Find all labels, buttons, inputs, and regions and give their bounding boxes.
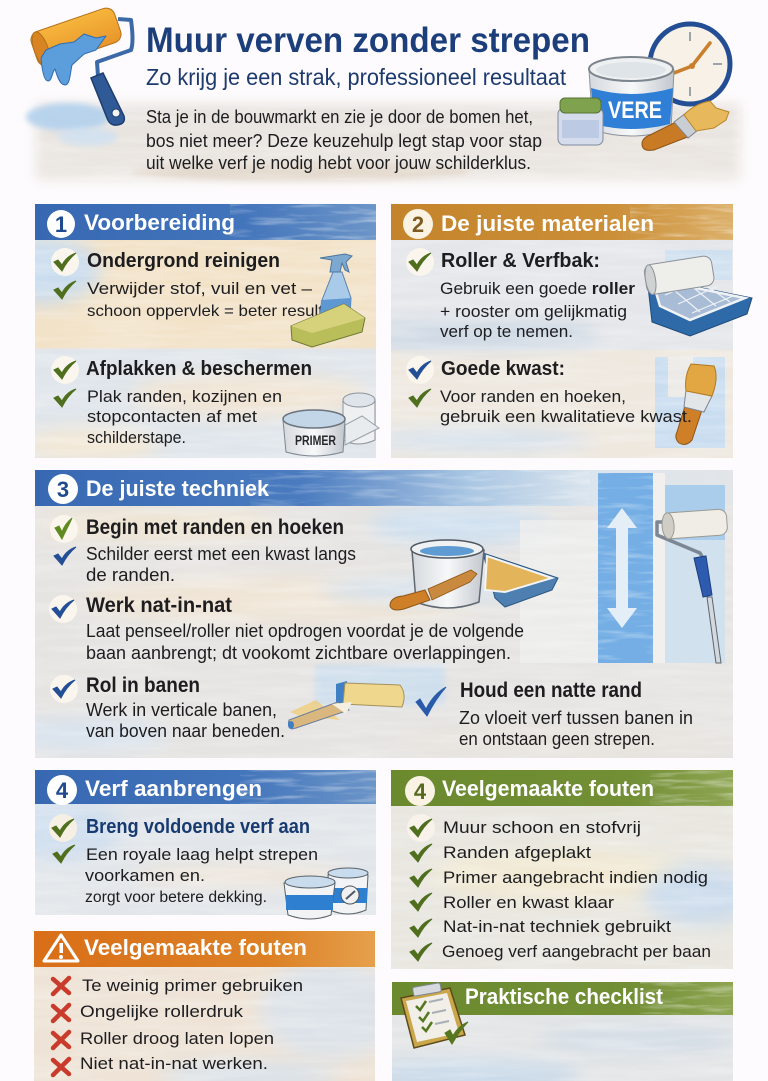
check xyxy=(410,919,432,937)
number badge: 2 xyxy=(412,212,424,237)
check xyxy=(54,281,76,299)
arrow: up and down xyxy=(607,508,637,628)
icon: paint can VERE: VERE xyxy=(608,97,662,124)
body text xyxy=(440,387,692,426)
section header bar xyxy=(391,770,733,806)
check xyxy=(416,687,446,716)
subheading: Roller & Verfbak: xyxy=(441,250,600,272)
body text: + rooster om gelijkmatig xyxy=(440,302,627,321)
body text: schilderstape. xyxy=(87,428,186,447)
header xyxy=(26,6,740,181)
body text: en ontstaan geen strepen. xyxy=(459,729,655,749)
body text: stopcontacten af met xyxy=(87,407,257,426)
body text: verf op te nemen. xyxy=(440,322,573,341)
list item: Roller en kwast klaar xyxy=(443,893,614,912)
body text xyxy=(86,544,356,585)
icon: cross xyxy=(53,1005,69,1021)
body text xyxy=(459,708,693,749)
subheading: Afplakken & beschermen xyxy=(86,358,312,380)
subheading: Werk nat-in-nat xyxy=(86,594,232,617)
check xyxy=(54,547,76,565)
intro text: uit welke verf je nodig hebt voor jouw schilderklus. xyxy=(146,153,531,173)
check xyxy=(50,675,78,703)
check xyxy=(406,356,434,384)
body text xyxy=(440,279,635,341)
check xyxy=(49,814,77,842)
body text: voorkamen en. xyxy=(85,866,205,885)
checklist xyxy=(407,814,711,961)
check xyxy=(51,356,79,384)
body text xyxy=(86,621,524,663)
check xyxy=(406,248,434,276)
icon: jar xyxy=(558,98,603,145)
icon: brush xyxy=(676,364,716,444)
error list xyxy=(53,976,303,1075)
section title: Praktische checklist xyxy=(465,984,664,1009)
panel: 4 Veelgemaakte fouten (groen) xyxy=(391,770,755,969)
number badge xyxy=(47,210,75,238)
check xyxy=(53,845,75,863)
icon: paint roller xyxy=(29,6,132,125)
number badge: 4 xyxy=(414,779,427,804)
body text: Verwijder stof, vuil en vet – xyxy=(87,279,313,298)
section title: Veelgemaakte fouten xyxy=(442,776,654,801)
number badge xyxy=(47,775,77,805)
intro text xyxy=(146,107,542,173)
intro text: Sta je in de bouwmarkt en zie je door de bomen het, xyxy=(146,107,533,127)
list item: Roller droog laten lopen xyxy=(80,1029,274,1048)
section header bar xyxy=(392,982,733,1015)
roller stripes and arrow xyxy=(598,473,725,663)
icon: sponge xyxy=(291,304,365,347)
subheading: Houd een natte rand xyxy=(460,679,642,702)
header wash band xyxy=(26,103,740,181)
number badge: 3 xyxy=(57,477,69,502)
icon: primer can: PRIMER xyxy=(295,433,336,448)
body text: Voor randen en hoeken, xyxy=(440,387,626,406)
check xyxy=(410,869,432,887)
panel: Veelgemaakte fouten (oranje) xyxy=(34,931,400,1081)
icon: spray bottle xyxy=(320,254,352,316)
title: Muur verven zonder strepen xyxy=(146,21,590,60)
section title: Voorbereiding xyxy=(84,210,235,235)
section title: Verf aanbrengen xyxy=(85,776,262,801)
section title: De juiste techniek xyxy=(86,476,270,501)
subtitle: Zo krijg je een strak, professioneel resultaat xyxy=(146,64,567,90)
section header bar xyxy=(34,931,375,967)
list item: Niet nat-in-nat werken. xyxy=(80,1054,268,1073)
body text: Een royale laag helpt strepen xyxy=(86,845,318,864)
check xyxy=(410,943,432,961)
check xyxy=(410,844,432,862)
section header bar xyxy=(391,204,733,240)
list item: Te weinig primer gebruiken xyxy=(82,976,303,995)
panel: 3 De juiste techniek xyxy=(0,470,733,758)
check xyxy=(409,389,431,407)
body text xyxy=(85,845,318,906)
section title: De juiste materialen xyxy=(441,211,654,236)
icon: cross xyxy=(53,1059,69,1075)
icon: primer can xyxy=(283,410,345,456)
body text xyxy=(87,387,282,447)
check xyxy=(51,248,79,276)
icon: clock xyxy=(650,24,730,104)
panel: 4 Verf aanbrengen xyxy=(0,770,376,919)
body text: Zo vloeit verf tussen banen in xyxy=(459,708,693,728)
icon: paint brush xyxy=(642,101,729,150)
body text: de randen. xyxy=(86,565,175,585)
list item: Genoeg verf aangebracht per baan xyxy=(442,942,711,961)
body text xyxy=(87,279,324,320)
check xyxy=(50,515,78,543)
body text: Gebruik een goede roller xyxy=(440,279,635,298)
subheading: Begin met randen en hoeken xyxy=(86,516,344,539)
number badge xyxy=(403,209,433,239)
body text: Laat penseel/roller niet opdrogen voordat je de volgende xyxy=(86,621,524,641)
body text xyxy=(86,700,285,741)
icon: cross xyxy=(53,978,69,994)
number badge: 1 xyxy=(55,212,67,237)
panel: 2 De juiste materialen xyxy=(360,204,752,458)
icon: roller and tray xyxy=(643,255,752,336)
body text: Plak randen, kozijnen en xyxy=(87,387,282,406)
body text: Werk in verticale banen, xyxy=(86,700,277,720)
section title: Veelgemaakte fouten xyxy=(84,935,307,960)
list item: Nat-in-nat techniek gebruikt xyxy=(443,917,671,936)
subheading: Breng voldoende verf aan xyxy=(86,816,310,838)
check xyxy=(407,814,435,842)
check xyxy=(49,595,77,623)
icon: cross xyxy=(53,1032,69,1048)
icon: clipboard xyxy=(401,983,468,1048)
body text: Schilder eerst met een kwast langs xyxy=(86,544,356,564)
icon: wall roller xyxy=(657,509,728,663)
icon: warning triangle xyxy=(44,935,78,961)
section header bar xyxy=(35,770,376,804)
icon: paint can VERE xyxy=(589,57,674,136)
check xyxy=(410,893,432,911)
body text: zorgt voor betere dekking. xyxy=(85,889,267,906)
subheading: Goede kwast: xyxy=(441,358,565,380)
panel: 1 Voorbereiding xyxy=(35,204,380,458)
list item: Randen afgeplakt xyxy=(443,843,591,862)
icon: bucket, tray and brush xyxy=(390,540,558,610)
body text: schoon oppervlek = beter result xyxy=(87,303,324,320)
icon: small roller xyxy=(288,681,404,729)
panel: Praktische checklist xyxy=(392,982,733,1081)
body text: van boven naar beneden. xyxy=(86,721,285,741)
check xyxy=(54,389,76,407)
intro text: bos niet meer? Deze keuzehulp legt stap voor stap xyxy=(146,131,542,151)
section header bar xyxy=(35,204,376,240)
subheading: Ondergrond reinigen xyxy=(87,250,280,272)
body text: baan aanbrengt; dt vookomt zichtbare overlappingen. xyxy=(86,643,511,663)
list item: Muur schoon en stofvrij xyxy=(443,818,641,837)
list item: Ongelijke rollerdruk xyxy=(80,1002,244,1021)
icon: two paint cans xyxy=(284,868,368,919)
number badge xyxy=(405,776,435,806)
subheading: Rol in banen xyxy=(86,674,200,697)
section header bar xyxy=(35,470,733,506)
icon: tape roll xyxy=(343,393,379,445)
number badge: 4 xyxy=(56,778,69,803)
number badge xyxy=(48,474,78,504)
list item: Primer aangebracht indien nodig xyxy=(443,868,708,887)
body text: gebruik een kwalitatieve kwast. xyxy=(440,407,692,426)
